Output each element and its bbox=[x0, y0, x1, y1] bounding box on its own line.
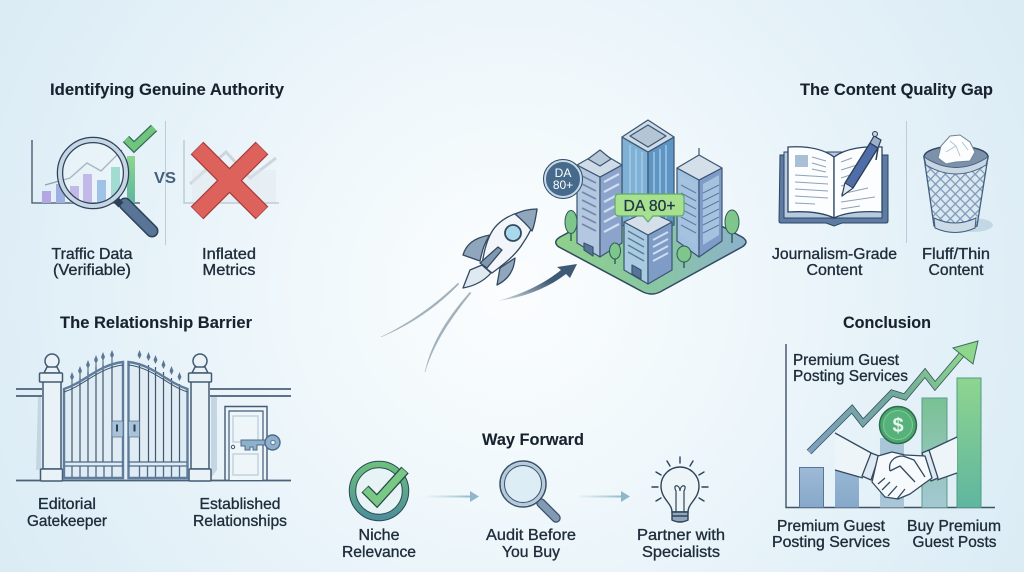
label: niche relevance: Relevance bbox=[342, 544, 416, 561]
illustration: da 80+ city bbox=[544, 120, 746, 294]
badge: da 80+ green label: DA 80+ bbox=[624, 198, 676, 215]
label: editorial gatekeeper bbox=[27, 496, 108, 530]
label: premium guest posting services chart label bbox=[793, 352, 908, 385]
illustration: door bbox=[225, 406, 267, 480]
badge: da 80+ green label bbox=[615, 194, 684, 222]
illustration: wall and ground bbox=[16, 389, 291, 480]
icon: open book bbox=[779, 147, 888, 226]
heading: conclusion: Conclusion bbox=[843, 313, 931, 332]
icon: red cross bbox=[197, 148, 262, 213]
panel: the relationship barrier bbox=[16, 313, 291, 530]
label: journalism-grade content: Journalism-Grade bbox=[772, 246, 897, 263]
panel: identifying genuine authority bbox=[32, 80, 285, 279]
icon: key bbox=[241, 435, 280, 450]
label: niche relevance: Niche bbox=[358, 527, 400, 544]
platform bbox=[556, 188, 746, 294]
label: journalism-grade content bbox=[772, 246, 897, 279]
label: traffic data bbox=[52, 246, 133, 279]
label: inflated metrics bbox=[202, 246, 256, 279]
icon: lightbulb bbox=[652, 457, 708, 522]
label: editorial gatekeeper: Gatekeeper bbox=[27, 513, 108, 530]
trail line lower bbox=[425, 292, 471, 372]
trail lines bbox=[381, 283, 459, 337]
illustration: left gate bbox=[64, 350, 123, 478]
label: inflated metrics: Inflated bbox=[202, 246, 256, 263]
icon: niche relevance check bbox=[352, 464, 406, 518]
label: established relationships: Established bbox=[200, 496, 280, 513]
rocket bbox=[463, 209, 537, 288]
building: tall back tower bbox=[622, 120, 674, 235]
heading: the content quality gap: The Content Quality Gap bbox=[800, 80, 993, 99]
label: buy premium guest posts: Buy Premium bbox=[907, 518, 1001, 535]
label: inflated metrics: Metrics bbox=[202, 262, 256, 279]
label: traffic data: Traffic Data bbox=[52, 246, 133, 263]
chart: growth bars bbox=[786, 344, 995, 508]
heading: the relationship barrier: The Relationship Barrier bbox=[60, 313, 252, 332]
icon: dollar coin: $ bbox=[892, 415, 904, 437]
icon: green check fill bbox=[126, 128, 154, 147]
badge: da 80+ circle: DA bbox=[555, 166, 571, 180]
chart: inflated metrics bbox=[184, 140, 279, 203]
illustration: right pillar bbox=[188, 354, 212, 481]
label: premium guest posting services chart label: Posting Services bbox=[793, 368, 908, 385]
label: audit before you buy: Audit Before bbox=[486, 527, 576, 544]
panel: way forward bbox=[342, 430, 725, 561]
label: buy premium guest posts: Guest Posts bbox=[912, 534, 996, 551]
label: audit before you buy bbox=[486, 527, 576, 561]
building: left tower bbox=[577, 150, 622, 257]
icon: dollar coin bbox=[880, 406, 916, 444]
label: fluff/thin content: Fluff/Thin bbox=[922, 246, 990, 263]
label: premium guest posting services chart label: Premium Guest bbox=[793, 352, 900, 369]
label: premium guest posting services: Posting Services bbox=[772, 534, 890, 551]
panel: conclusion bbox=[772, 313, 1001, 551]
label: partner with specialists: Partner with bbox=[637, 527, 725, 544]
label: partner with specialists: Specialists bbox=[642, 544, 720, 561]
label: traffic data: (Verifiable) bbox=[53, 262, 131, 279]
illustration: right gate bbox=[128, 350, 188, 478]
label: premium guest posting services: Premium Guest bbox=[777, 518, 886, 535]
divider bbox=[906, 121, 908, 243]
label: premium guest posting services bbox=[772, 518, 890, 551]
arrow toward city bbox=[498, 264, 577, 301]
label: established relationships: Relationships bbox=[193, 513, 287, 530]
arrow: step one to two bbox=[427, 491, 479, 502]
divider bbox=[164, 121, 166, 245]
arrow: step two to three bbox=[578, 491, 630, 502]
icon: green check bbox=[126, 128, 154, 147]
arrow: rising trend bbox=[809, 341, 978, 452]
text: versus: VS bbox=[154, 170, 176, 187]
illustration: rocket and trails bbox=[381, 209, 577, 372]
heading: identifying genuine authority: Identifying Genuine Authority bbox=[50, 80, 285, 99]
label: editorial gatekeeper: Editorial bbox=[38, 496, 96, 513]
chart: traffic data under magnifier bbox=[32, 140, 140, 203]
label: partner with specialists bbox=[637, 527, 725, 561]
label: fluff/thin content: Content bbox=[928, 262, 984, 279]
label: niche relevance bbox=[342, 527, 416, 561]
illustration: left pillar bbox=[40, 354, 62, 481]
badge: da 80+ circle bbox=[544, 160, 582, 198]
building: front block bbox=[624, 211, 672, 284]
icon: audit magnifier bbox=[500, 461, 556, 518]
badge: da 80+ circle: 80+ bbox=[553, 178, 573, 192]
icon: handshake bbox=[835, 433, 957, 499]
panel: the content quality gap bbox=[772, 80, 993, 279]
label: fluff/thin content bbox=[922, 246, 990, 279]
label: buy premium guest posts bbox=[907, 518, 1001, 551]
label: journalism-grade content: Content bbox=[806, 262, 863, 279]
label: audit before you buy: You Buy bbox=[502, 544, 560, 561]
icon: wastebasket with crumpled paper bbox=[924, 135, 993, 232]
icon: magnifying glass bbox=[60, 140, 152, 231]
trees bbox=[565, 210, 739, 268]
label: established relationships bbox=[193, 496, 287, 530]
icon: pen bbox=[842, 132, 881, 196]
building: right tower bbox=[677, 148, 722, 257]
heading: way forward: Way Forward bbox=[482, 430, 584, 449]
